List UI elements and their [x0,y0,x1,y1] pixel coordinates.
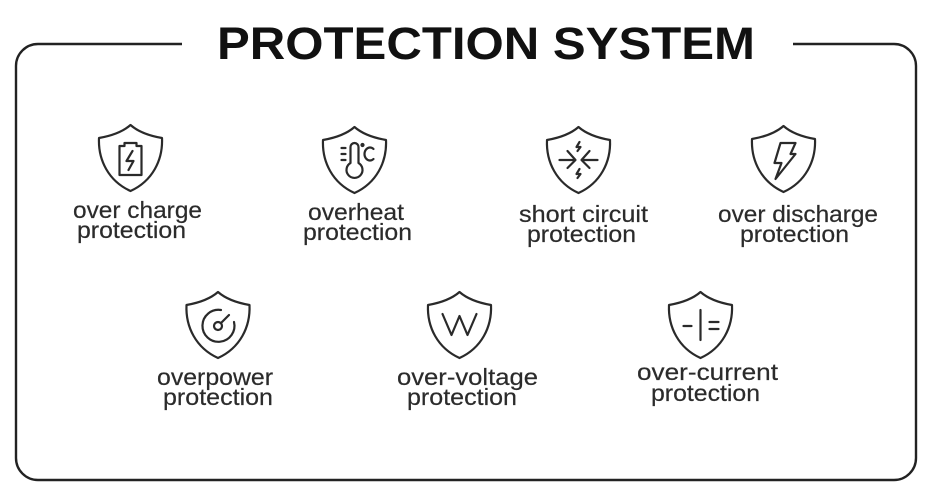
label: protection [77,217,186,243]
item: over-voltage protection [397,292,538,410]
icon: shield with thermometer [323,127,386,193]
label [303,199,412,245]
label: over charge [73,197,202,223]
icon: shield with battery [99,125,162,191]
label: protection [651,380,760,406]
label [718,201,878,247]
label [157,364,273,410]
label: over discharge [718,201,878,227]
label: short circuit [519,201,649,227]
item: over charge protection [73,125,202,243]
item: overpower protection [157,292,273,410]
label [637,359,779,406]
label [397,364,538,410]
item: over discharge protection [718,126,878,247]
label [519,201,649,247]
icon: shield with current symbol [669,292,732,358]
label: protection [740,221,849,247]
label: protection [303,219,412,245]
icon: shield with W [428,292,491,358]
label: over-current [637,359,779,385]
label: protection [163,384,273,410]
label: protection [527,221,636,247]
label: overpower [157,364,273,390]
item: over-current protection [637,292,779,406]
icon: shield with converging arrows [547,127,610,193]
label: over-voltage [397,364,538,390]
label: protection [407,384,517,410]
item: short circuit protection [519,127,649,247]
label [73,197,202,243]
icon: shield with gauge [186,292,250,358]
label: overheat [308,199,405,225]
item: overheat protection [303,127,412,245]
icon: shield with lightning bolt [752,126,815,192]
title: PROTECTION SYSTEM [217,18,755,69]
